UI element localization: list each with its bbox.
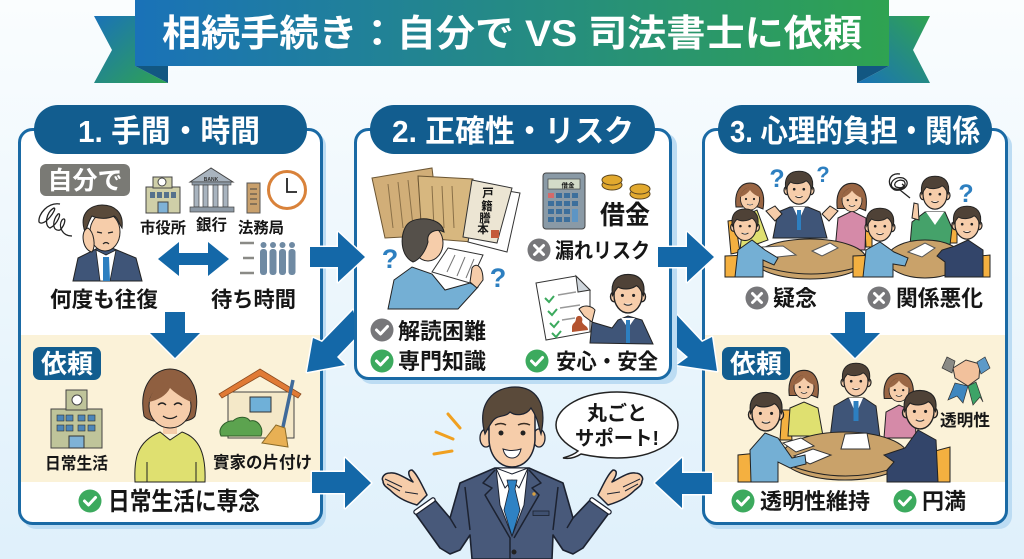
icons: question marks and scribble: ?: [769, 165, 785, 193]
status: 安心・安全: 安心・安全: [556, 350, 658, 374]
text: 戸籍謄本: 戸: [482, 187, 494, 200]
panel: 3 心理的負担・関係: [704, 105, 1012, 529]
header pill 2: 2. 正確性・リスク: [392, 114, 634, 149]
icon: calculator: [543, 173, 585, 229]
arrow: panel 2 to lower left: [307, 310, 360, 372]
icon: worried man: [73, 205, 142, 281]
text: place labels: 法務局: [238, 218, 284, 237]
icon: city hall: [146, 177, 180, 213]
icon: coins: [602, 175, 650, 199]
label: 依頼: 依頼: [730, 349, 782, 379]
icons: question marks and scribble: ?: [958, 180, 974, 208]
label: 自分で: 自分で: [47, 167, 123, 195]
icon: confused person reading: ?: [382, 244, 398, 274]
result: 円満: [894, 489, 966, 514]
icon: old documents: [372, 168, 520, 252]
icon: smiling woman: [135, 369, 205, 482]
header pill 2: [370, 105, 655, 154]
label: 依頼: 依頼: [41, 349, 93, 379]
text: place labels: [140, 216, 284, 237]
status: 疑念: 疑念: [773, 286, 817, 311]
icon: bank: BANK: [204, 177, 219, 183]
jacket: [415, 468, 609, 559]
text: 何度も往復: 何度も往復: [50, 288, 158, 312]
scene: family with scrivener around table: [738, 363, 950, 482]
result: 円満: 円満: [922, 489, 966, 514]
icon: emphasis ticks: [434, 414, 460, 454]
label: 依頼: [722, 347, 790, 380]
icon: office building: [51, 390, 102, 448]
icon: waiting queue: [240, 242, 296, 275]
text: 實家の片付け: 實家の片付け: [213, 452, 312, 472]
text: place labels: 市役所: [140, 218, 186, 237]
icon: calculator: 借金: [562, 180, 575, 190]
icon: advisor with document: [579, 274, 653, 344]
shirt and tie: [450, 468, 573, 559]
icon: stress scribble: [39, 204, 72, 236]
left hand: [382, 470, 433, 512]
text: 借金: 借金: [600, 200, 650, 230]
result: 透明性維持: 透明性維持: [760, 489, 870, 514]
text: 戸籍謄本: 籍: [481, 199, 493, 213]
status: 関係悪化: 関係悪化: [896, 286, 983, 311]
header pill 3: [718, 105, 992, 154]
arrow: panel 1 down: [150, 312, 200, 358]
status: 漏れリスク: 漏れリスク: [555, 240, 650, 263]
panel: 2 正確性・リスク: [356, 105, 677, 384]
icons: question marks and scribble: ?: [816, 162, 830, 187]
header pill 1: 1. 手間・時間: [78, 114, 260, 149]
speech bubble: [556, 392, 678, 458]
text: place labels: 銀行: [196, 216, 227, 234]
result: 日常生活に専念: 日常生活に専念: [108, 488, 260, 516]
text: 待ち時間: 待ち時間: [211, 288, 296, 312]
text: 戸籍謄本: [477, 187, 494, 236]
right hand: [592, 470, 643, 512]
icon: checklist with stamp: [536, 276, 590, 340]
scene: confused family around table: [725, 171, 990, 279]
text: 戸籍謄本: 謄: [479, 211, 491, 225]
arrow: panel 3 bottom to advisor: [655, 458, 712, 508]
label: 依頼: [33, 347, 101, 380]
arrow: panel 2 to panel 3: [658, 232, 714, 282]
icon: confused person reading: [382, 219, 506, 309]
text: 日常生活: 日常生活: [45, 454, 108, 473]
header pill 1: [34, 105, 307, 154]
header pill 3: 3. 心理的負担・関係: [730, 114, 980, 149]
icon: house with broom: [219, 369, 301, 447]
text: 透明性: 透明性: [940, 411, 990, 430]
speech bubble: 丸ごと: [587, 401, 647, 425]
speech bubble: サポート!: [575, 427, 659, 450]
arrow: panel 1 to panel 2: [310, 232, 365, 282]
icon: clock: [268, 172, 306, 208]
arrow: double headed: [158, 242, 229, 276]
icon: bank: [190, 168, 234, 212]
title text: 相続手続き：自分で VS 司法書士に依頼: [162, 13, 862, 54]
title banner: [94, 0, 930, 83]
icon: ledger: [247, 183, 260, 213]
advisor: central figure: [382, 387, 643, 559]
status: 疑念: [746, 286, 817, 311]
arrow: panel 2 to lower right: [665, 310, 717, 371]
status: 漏れリスク: [528, 238, 650, 263]
panel: 1 手間・時間: [20, 105, 326, 529]
icon: confused person reading: ?: [490, 263, 506, 293]
arrow: panel 3 down: [830, 312, 880, 358]
head: [480, 387, 545, 467]
arrow: panel 1 bottom to advisor: [312, 458, 371, 508]
status: 解読困難: 解読困難: [398, 319, 486, 344]
icons: question marks and scribble: [769, 162, 974, 208]
text: 戸籍謄本: 本: [477, 222, 489, 236]
icon: handshake with ribbons: [942, 357, 990, 405]
status: 専門知識: 専門知識: [398, 349, 486, 374]
